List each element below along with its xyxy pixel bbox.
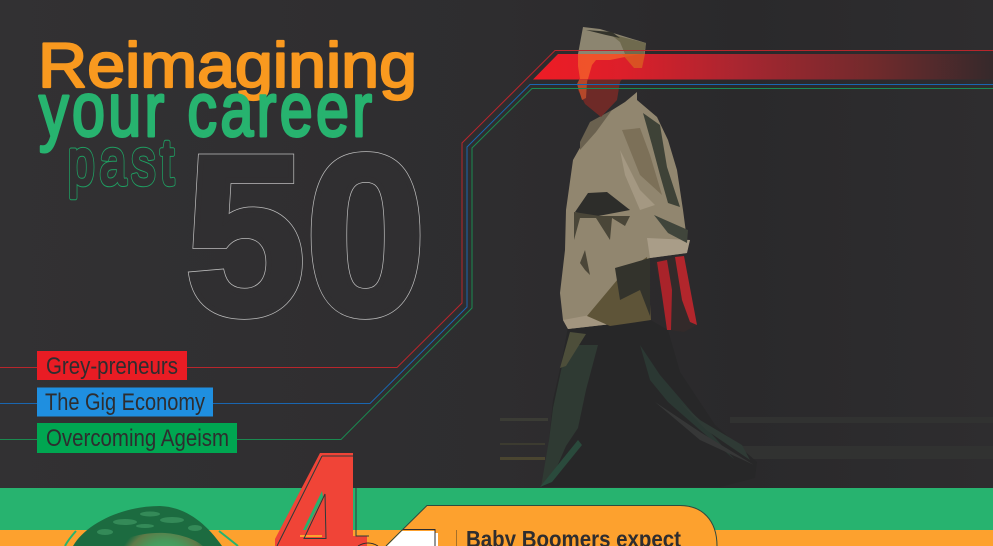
title line: past: past: [68, 126, 174, 198]
number 4: [275, 453, 378, 546]
jacket: [560, 92, 687, 329]
green connector line: [0, 88, 993, 440]
green band: [0, 488, 993, 546]
title line: past: past: [68, 126, 174, 198]
orange band: [0, 530, 993, 546]
divider: [456, 530, 457, 546]
red band: [533, 54, 993, 80]
title: [38, 31, 426, 363]
connector lines: [0, 50, 993, 440]
title number: 50: 50: [185, 109, 426, 363]
blue connector line: [0, 84, 993, 404]
highlights over face on band: [578, 54, 645, 79]
cap: [578, 27, 646, 60]
red hand: [655, 256, 697, 332]
photo: walking man: [500, 27, 993, 487]
label: Overcoming Ageism: Overcoming Ageism: [46, 425, 229, 452]
title number: 50: 50: [185, 109, 426, 363]
portrait: head: [65, 506, 238, 546]
white quote shape: [387, 530, 438, 546]
label: The Gig Economy: The Gig Economy: [45, 389, 205, 416]
title line: your career: your career: [39, 68, 372, 153]
title line: Reimagining: Reimagining: [38, 31, 417, 101]
neck and face: [578, 58, 636, 117]
speech bubble: [386, 506, 717, 546]
ground shadows: [500, 417, 993, 460]
trousers: [541, 318, 757, 487]
label: Grey-preneurs: Grey-preneurs: [46, 353, 178, 380]
red connector line: [0, 50, 993, 368]
